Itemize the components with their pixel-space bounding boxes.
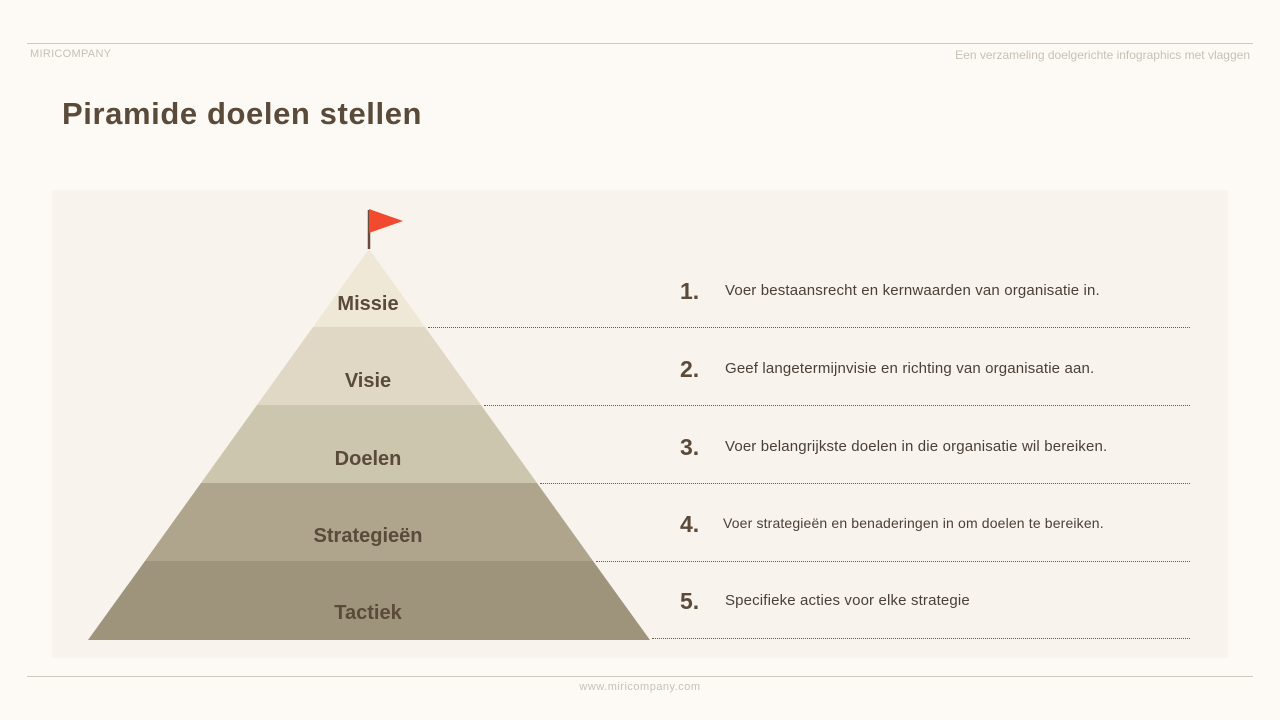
band: Missie — [313, 249, 425, 327]
item 4 — [596, 511, 1190, 562]
band: Tactiek — [88, 561, 650, 640]
text: Geef langetermijnvisie en richting van organisatie aan. — [725, 360, 1094, 377]
subtitle label: Een verzameling doelgerichte infographics met vlaggen — [955, 48, 1250, 62]
band: Strategieën: Strategieën — [314, 525, 422, 547]
item 2 — [484, 356, 1190, 406]
text: 5. — [680, 588, 699, 614]
band: Tactiek: Tactiek — [334, 602, 403, 624]
header line — [27, 43, 1253, 44]
band: Strategieën — [145, 483, 593, 561]
text: Voer strategieën en benaderingen in om doelen te bereiken. — [723, 515, 1104, 531]
title: Piramide doelen stellen — [62, 96, 422, 131]
text: 4. — [680, 511, 699, 537]
text: 1. — [680, 278, 699, 304]
footer url: www.miricompany.com — [579, 681, 701, 693]
text: Specifieke acties voor elke strategie — [725, 592, 970, 609]
band: Doelen — [201, 405, 537, 483]
text: 3. — [680, 434, 699, 460]
panel background — [52, 190, 1228, 658]
band: Doelen: Doelen — [335, 448, 401, 470]
text: Voer belangrijkste doelen in die organisatie wil bereiken. — [725, 438, 1107, 455]
text: 2. — [680, 356, 699, 382]
brand label: MIRICOMPANY — [30, 48, 111, 60]
icon: flag — [369, 209, 403, 249]
item 1 — [428, 278, 1190, 328]
band: Missie: Missie — [337, 293, 399, 315]
band: Visie: Visie — [345, 370, 391, 392]
text: Voer bestaansrecht en kernwaarden van organisatie in. — [725, 282, 1100, 299]
item 3 — [540, 434, 1190, 484]
band: Visie — [257, 327, 481, 405]
footer line — [27, 676, 1253, 677]
item 5 — [652, 588, 1190, 639]
